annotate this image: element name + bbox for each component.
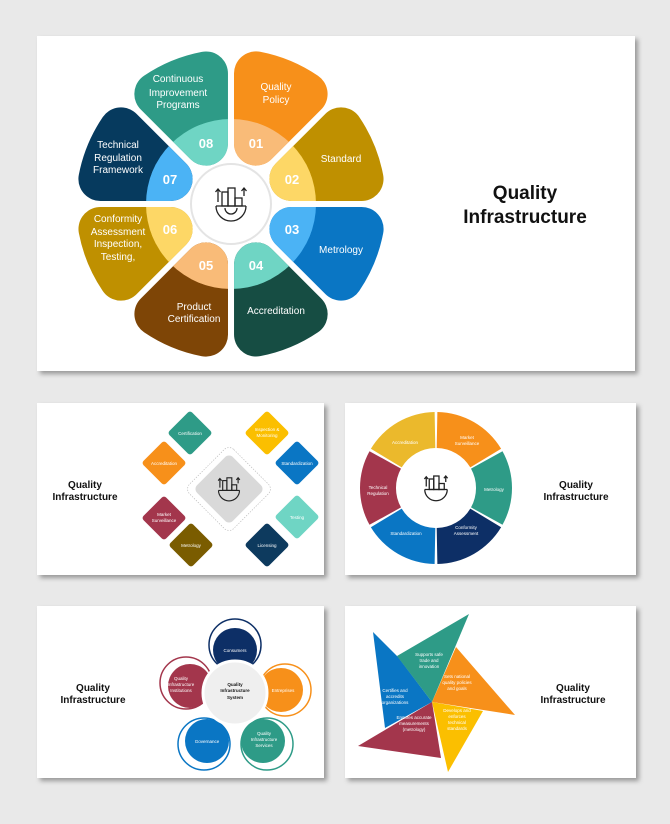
pinwheel: and goals [447, 686, 468, 691]
title: Infrastructure [52, 492, 118, 503]
petal labels: Regulation [94, 153, 142, 164]
circle cluster [160, 619, 311, 770]
circle cluster: Entreprises [272, 688, 295, 693]
title: Quality [559, 480, 593, 491]
title: Quality [493, 183, 558, 204]
pinwheel: Develops and [443, 708, 471, 713]
ring chart: Technical [369, 485, 387, 490]
petal labels: Improvement [149, 88, 207, 99]
title: Infrastructure [540, 695, 606, 706]
title [463, 183, 587, 228]
title: Quality [68, 480, 102, 491]
title: Infrastructure [543, 492, 609, 503]
petal labels: Metrology [319, 245, 363, 256]
flower diagram [86, 59, 376, 349]
circle cluster: Quality [227, 682, 243, 687]
numbers: 02 [285, 172, 299, 187]
petal labels: Assessment [91, 227, 145, 238]
title: Quality [76, 683, 110, 694]
pinwheel [358, 614, 515, 772]
petal labels: Framework [93, 165, 144, 176]
center circle [191, 164, 271, 244]
pinwheel: quality policies [442, 680, 472, 685]
circle cluster: Infrastructure [220, 688, 250, 693]
pinwheel: organizations [382, 700, 409, 705]
petal labels: Certification [168, 314, 220, 325]
pinwheel: trade and [419, 658, 439, 663]
panel: circles slide [37, 606, 324, 778]
petal labels: Continuous [153, 74, 203, 85]
circle cluster: System [227, 695, 243, 700]
circle cluster: Infrastructure [251, 737, 278, 742]
circle cluster: Services [255, 743, 273, 748]
ring chart: Market [460, 435, 475, 440]
diamonds: Standardization [281, 461, 313, 466]
diamonds [141, 410, 320, 568]
diamonds: Testing [290, 515, 305, 520]
petal labels: Programs [156, 100, 200, 111]
title [60, 683, 126, 706]
petal labels: Conformity [94, 214, 142, 225]
ring chart: Regulation [367, 491, 389, 496]
pinwheel: Ensures accurate [396, 715, 432, 720]
ring chart: Conformity [455, 525, 478, 530]
diamonds: Licensing [257, 543, 277, 548]
ring chart: Accreditation [392, 440, 419, 445]
pinwheel: accredits [386, 694, 405, 699]
numbers: 07 [163, 172, 177, 187]
diamonds: Surveillance [152, 518, 177, 523]
petal labels: Quality [260, 82, 292, 93]
diamonds: Metrology [181, 543, 202, 548]
diamonds: Accreditation [151, 461, 178, 466]
diamonds: Monitoring [256, 433, 278, 438]
numbers: 05 [199, 258, 213, 273]
petal labels: Technical [97, 140, 139, 151]
ring chart [360, 404, 512, 572]
numbers: 01 [249, 136, 263, 151]
numbers: 04 [249, 258, 264, 273]
ring chart: Surveillance [455, 441, 480, 446]
circle cluster: Consumers [223, 648, 247, 653]
petal labels: Inspection, [94, 239, 142, 250]
pinwheel: Certifies and [382, 688, 408, 693]
petal labels: Standard [321, 154, 361, 165]
petal labels [91, 74, 363, 325]
panel: pinwheel slide [345, 606, 636, 778]
circle cluster: Institutions [170, 688, 193, 693]
numbers: 08 [199, 136, 213, 151]
pinwheel: standards [447, 726, 468, 731]
title: Infrastructure [60, 695, 126, 706]
title [540, 683, 606, 706]
petal labels: Accreditation [247, 306, 305, 317]
ring chart: Standardization [390, 531, 422, 536]
numbers [163, 136, 299, 273]
panel: main slide [37, 36, 635, 371]
pinwheel: Sets national [444, 674, 470, 679]
pinwheel: measurements [399, 721, 430, 726]
circle cluster: Quality [257, 731, 272, 736]
panel: diamond slide [37, 403, 324, 575]
title: Quality [556, 683, 590, 694]
pinwheel: innovation [419, 664, 440, 669]
petal labels: Policy [263, 95, 289, 106]
circle cluster: Infrastructure [168, 682, 195, 687]
circle cluster: Quality [174, 676, 189, 681]
center diamond [185, 445, 273, 533]
pinwheel: enforces [448, 714, 466, 719]
diamonds: Market [157, 512, 172, 517]
pinwheel: technical [448, 720, 466, 725]
title [52, 480, 118, 503]
diamonds: Inspection & [255, 427, 279, 432]
pinwheel: (metrology) [403, 727, 426, 732]
petal labels: Testing, [101, 252, 135, 263]
numbers: 03 [285, 222, 299, 237]
title [543, 480, 609, 503]
icon: quality infrastructure [216, 188, 246, 221]
ring chart: Assessment [454, 531, 479, 536]
circle cluster: Governance [195, 739, 220, 744]
diamonds: Certification [178, 431, 202, 436]
pinwheel: Supports safe [415, 652, 443, 657]
numbers: 06 [163, 222, 177, 237]
ring chart: Metrology [484, 487, 505, 492]
petal labels: Product [177, 302, 211, 313]
title: Infrastructure [463, 207, 587, 228]
panel: ring slide [345, 403, 636, 575]
